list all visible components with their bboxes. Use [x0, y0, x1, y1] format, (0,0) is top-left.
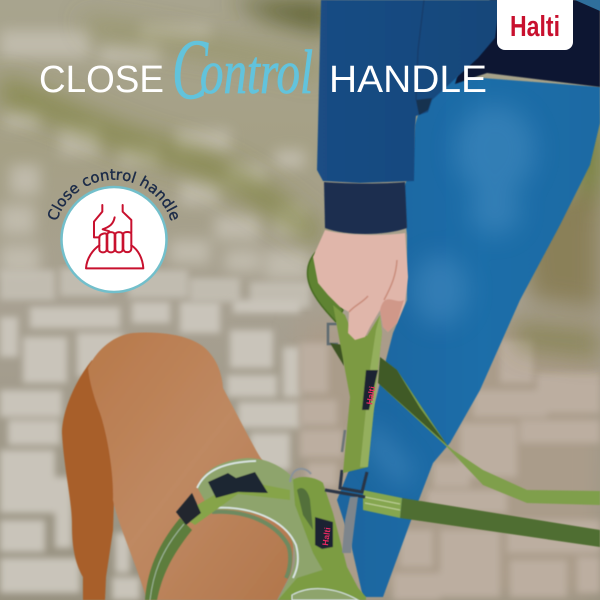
label text: harness: Halti	[320, 527, 333, 546]
harness: chest strap	[145, 518, 192, 600]
label text: handle: Halti	[364, 385, 377, 405]
paving: moss and shadows	[0, 0, 600, 360]
title word: control: ontrol	[200, 39, 313, 107]
harness: handle label	[315, 517, 333, 549]
title word: control: C	[172, 21, 209, 117]
title word: close: CLOSE	[39, 59, 164, 101]
dog body	[62, 333, 293, 600]
paving: right bricks	[300, 340, 600, 600]
leash: close control handle strap	[333, 305, 382, 473]
harness: padded handle	[293, 477, 363, 597]
leash: lower handle strap	[363, 490, 600, 547]
paving: far bricks, strongly blurred	[0, 25, 310, 280]
handle label	[362, 370, 378, 410]
dog: torso	[88, 333, 293, 600]
logo badge: Halti	[510, 11, 560, 43]
title word: handle: HANDLE	[329, 59, 487, 101]
dog: hind leg	[62, 360, 115, 600]
harness: buckle	[208, 472, 268, 498]
badge circle	[62, 187, 166, 292]
leash: side loop	[328, 324, 344, 366]
leash: back strap	[378, 357, 600, 505]
harness: ring	[290, 469, 311, 482]
harness: reflective piping	[197, 461, 298, 578]
icon: hand gripping handle	[86, 205, 143, 268]
harness: webbing strap	[180, 480, 290, 525]
leash labels	[320, 385, 377, 546]
jeans: faded highlights	[365, 105, 535, 490]
person: jeans	[337, 74, 600, 597]
feature badge	[48, 169, 178, 294]
top-right jacket sliver	[575, 0, 600, 11]
dog harness	[145, 458, 366, 600]
hand: finger creases	[349, 260, 397, 312]
curved label: Close control handle	[48, 169, 178, 221]
paving: right side tan wash	[300, 320, 600, 600]
hand: thumb shadow	[380, 299, 404, 332]
paving: mid bricks	[0, 268, 310, 308]
harness: front strap	[278, 565, 366, 600]
title	[39, 21, 487, 117]
paving: near bricks	[0, 300, 300, 600]
person: sleeve cuff	[324, 182, 407, 234]
harness: slider	[176, 493, 201, 525]
leash: metal clip	[325, 470, 367, 553]
person: dark top	[455, 0, 600, 87]
harness: mesh saddle	[197, 458, 345, 600]
person: jacket sleeve	[317, 0, 500, 183]
logo badge	[497, 0, 573, 50]
person: hand	[313, 230, 408, 340]
leash: bungee section	[308, 253, 343, 322]
